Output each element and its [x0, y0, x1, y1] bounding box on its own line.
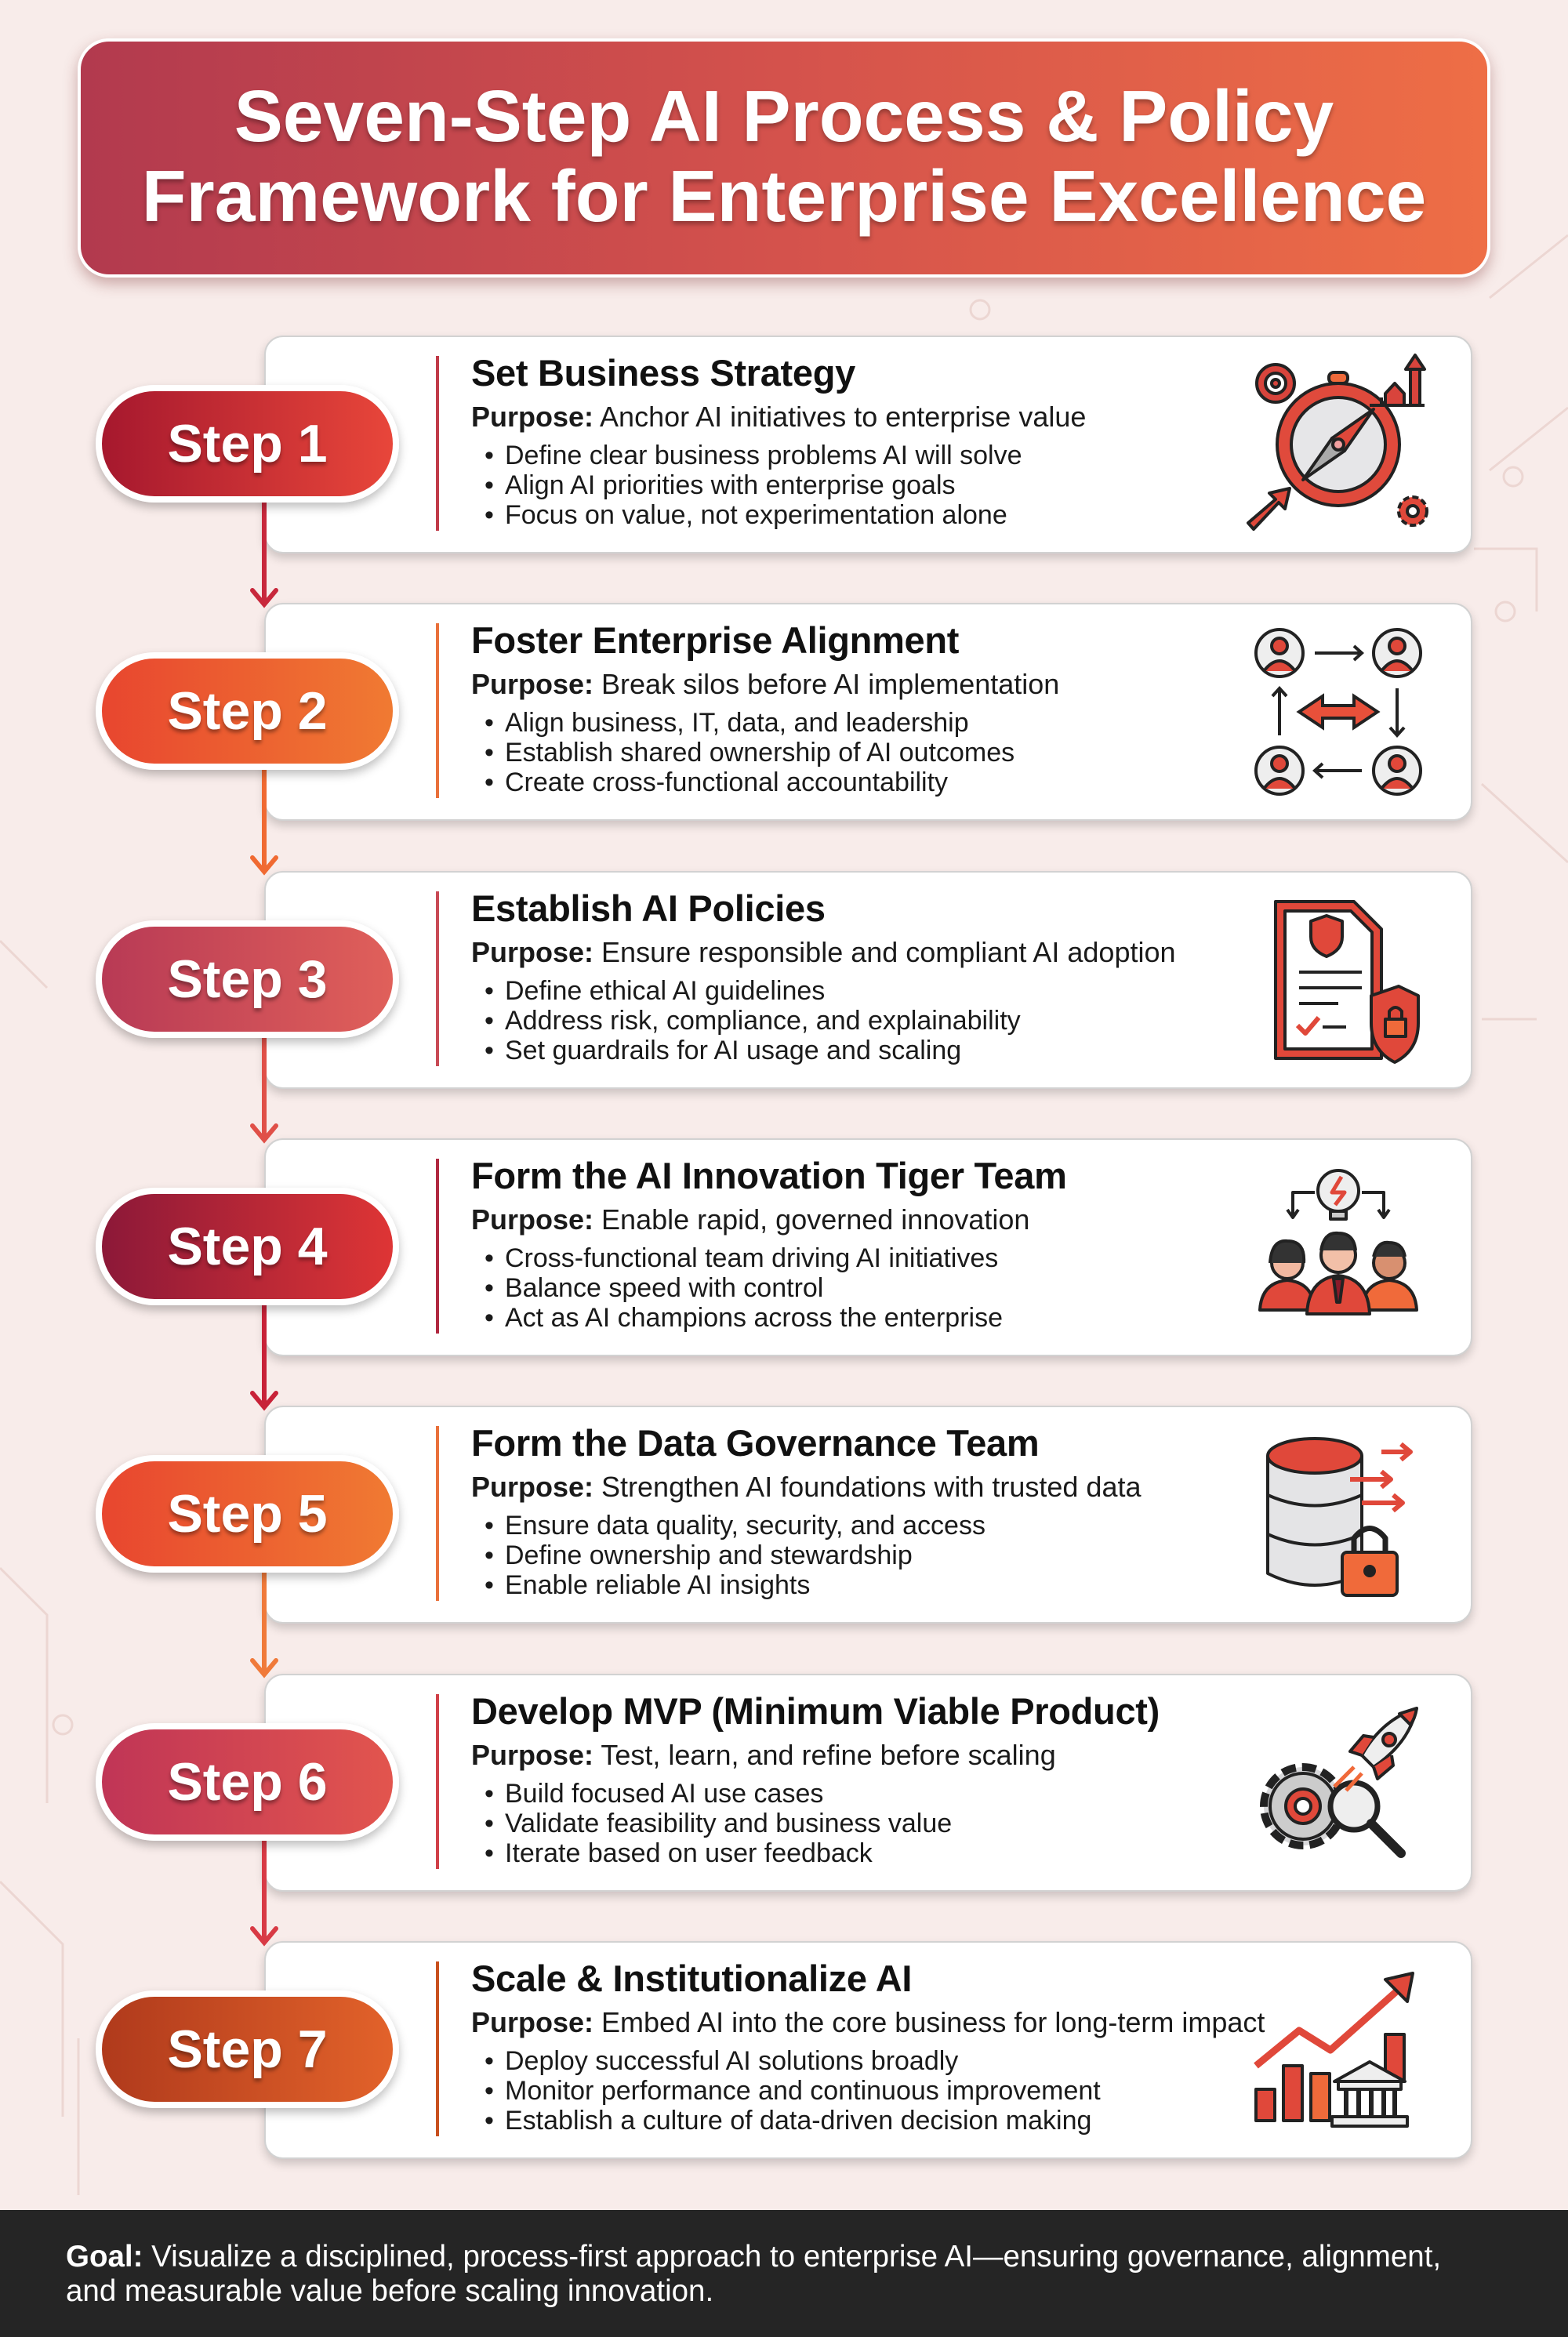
bullets 5: Define ownership and stewardship [505, 1540, 913, 1570]
purpose 3: Purpose: Ensure responsible and compliant AI adoption [471, 936, 1176, 968]
arrow: step 4 to 5 [250, 1305, 278, 1411]
step 1 [91, 336, 1476, 608]
bullets 7 [485, 2046, 1101, 2136]
icon: gear, magnifier, rocket [1260, 1707, 1418, 1858]
step 5 [91, 1406, 1476, 1678]
bullets 5 [485, 1511, 985, 1600]
bullets 7: Establish a culture of data-driven decision making [505, 2106, 1091, 2136]
pill: Step 2 [96, 652, 399, 770]
pill: Step 5 [96, 1455, 399, 1573]
heading 1: Set Business Strategy [471, 352, 855, 394]
bullets 1: Define clear business problems AI will solve [505, 441, 1022, 470]
step 2 [91, 603, 1476, 875]
card 2 [264, 603, 1472, 821]
purpose 2: Purpose: Break silos before AI implementation [471, 668, 1059, 700]
bullets 1: Focus on value, not experimentation alone [505, 500, 1007, 530]
card 5 [264, 1406, 1472, 1624]
pill: Step 4: Step 4 [167, 1217, 328, 1276]
card 3 [264, 871, 1472, 1089]
bullets 3: Address risk, compliance, and explainability [505, 1006, 1021, 1036]
footer goal statement: Goal: Visualize a disciplined, process-first approach to enterprise AI—ensuring governance, alignment, [66, 2240, 1441, 2273]
footer goal statement: and measurable value before scaling innovation. [66, 2274, 713, 2308]
arrow: step 1 to 2 [250, 503, 278, 608]
bullets 6: Build focused AI use cases [505, 1779, 823, 1809]
bullets 4: Balance speed with control [505, 1273, 823, 1303]
step 4 [91, 1138, 1476, 1411]
bullets 2 [485, 708, 1014, 797]
pill: Step 4 [96, 1188, 399, 1305]
card 1 [264, 336, 1472, 553]
pill: Step 6 [96, 1723, 399, 1841]
bullets 2: Create cross-functional accountability [505, 768, 948, 797]
heading 3: Establish AI Policies [471, 887, 826, 929]
pill: Step 1 [96, 385, 399, 503]
bullets 4 [485, 1243, 1003, 1333]
icon: team with lightbulb [1258, 1169, 1418, 1315]
title [78, 38, 1490, 278]
card 4 [264, 1138, 1472, 1356]
step 6 [91, 1674, 1476, 1946]
icon: people alignment [1254, 628, 1422, 796]
card 6 [264, 1674, 1472, 1892]
title: Framework for Enterprise Excellence [142, 155, 1426, 237]
bullets 1 [485, 441, 1022, 530]
pill: Step 5: Step 5 [167, 1484, 328, 1544]
heading 6: Develop MVP (Minimum Viable Product) [471, 1690, 1160, 1732]
bullets 6: Validate feasibility and business value [505, 1809, 952, 1838]
bullets 4: Act as AI champions across the enterprise [505, 1303, 1003, 1333]
card 7 [264, 1941, 1472, 2159]
bullets 2: Establish shared ownership of AI outcomes [505, 738, 1014, 768]
purpose 4: Purpose: Enable rapid, governed innovation [471, 1203, 1029, 1236]
bullets 5: Enable reliable AI insights [505, 1570, 810, 1600]
step 7 [91, 1941, 1476, 2168]
pill: Step 7: Step 7 [167, 2019, 328, 2079]
footer goal statement [0, 2210, 1568, 2337]
heading 4: Form the AI Innovation Tiger Team [471, 1155, 1067, 1196]
bullets 6 [485, 1779, 952, 1868]
pill: Step 3: Step 3 [167, 949, 328, 1009]
purpose 7: Purpose: Embed AI into the core business for long-term impact [471, 2006, 1265, 2038]
purpose 1: Purpose: Anchor AI initiatives to enterprise value [471, 401, 1086, 433]
bullets 7: Deploy successful AI solutions broadly [505, 2046, 958, 2076]
bullets 3 [485, 976, 1021, 1065]
heading 2: Foster Enterprise Alignment [471, 619, 959, 661]
pill: Step 6: Step 6 [167, 1752, 328, 1812]
step 3 [91, 871, 1476, 1143]
title: Seven-Step AI Process & Policy [234, 75, 1334, 157]
arrow: step 6 to 7 [250, 1841, 278, 1946]
icon: database with lock [1266, 1437, 1413, 1597]
heading 7: Scale & Institutionalize AI [471, 1958, 912, 1999]
pill: Step 3 [96, 920, 399, 1038]
icon: compass [1247, 353, 1428, 532]
bullets 4: Cross-functional team driving AI initiatives [505, 1243, 998, 1273]
purpose 6: Purpose: Test, learn, and refine before scaling [471, 1739, 1056, 1771]
arrow: step 2 to 3 [250, 770, 278, 875]
icon: growth chart with building [1254, 1972, 1414, 2128]
pill: Step 7 [96, 1990, 399, 2108]
pill: Step 1: Step 1 [167, 414, 328, 474]
bullets 5: Ensure data quality, security, and access [505, 1511, 985, 1540]
purpose 5: Purpose: Strengthen AI foundations with trusted data [471, 1471, 1142, 1503]
heading 5: Form the Data Governance Team [471, 1422, 1039, 1464]
arrow: step 5 to 6 [250, 1573, 278, 1678]
bullets 1: Align AI priorities with enterprise goals [505, 470, 955, 500]
bullets 3: Define ethical AI guidelines [505, 976, 825, 1006]
bullets 2: Align business, IT, data, and leadership [505, 708, 969, 738]
pill: Step 2: Step 2 [167, 681, 328, 741]
bullets 6: Iterate based on user feedback [505, 1838, 873, 1868]
icon: policy document with shield [1274, 900, 1420, 1064]
arrow: step 3 to 4 [250, 1038, 278, 1143]
bullets 7: Monitor performance and continuous improvement [505, 2076, 1101, 2106]
bullets 3: Set guardrails for AI usage and scaling [505, 1036, 961, 1065]
